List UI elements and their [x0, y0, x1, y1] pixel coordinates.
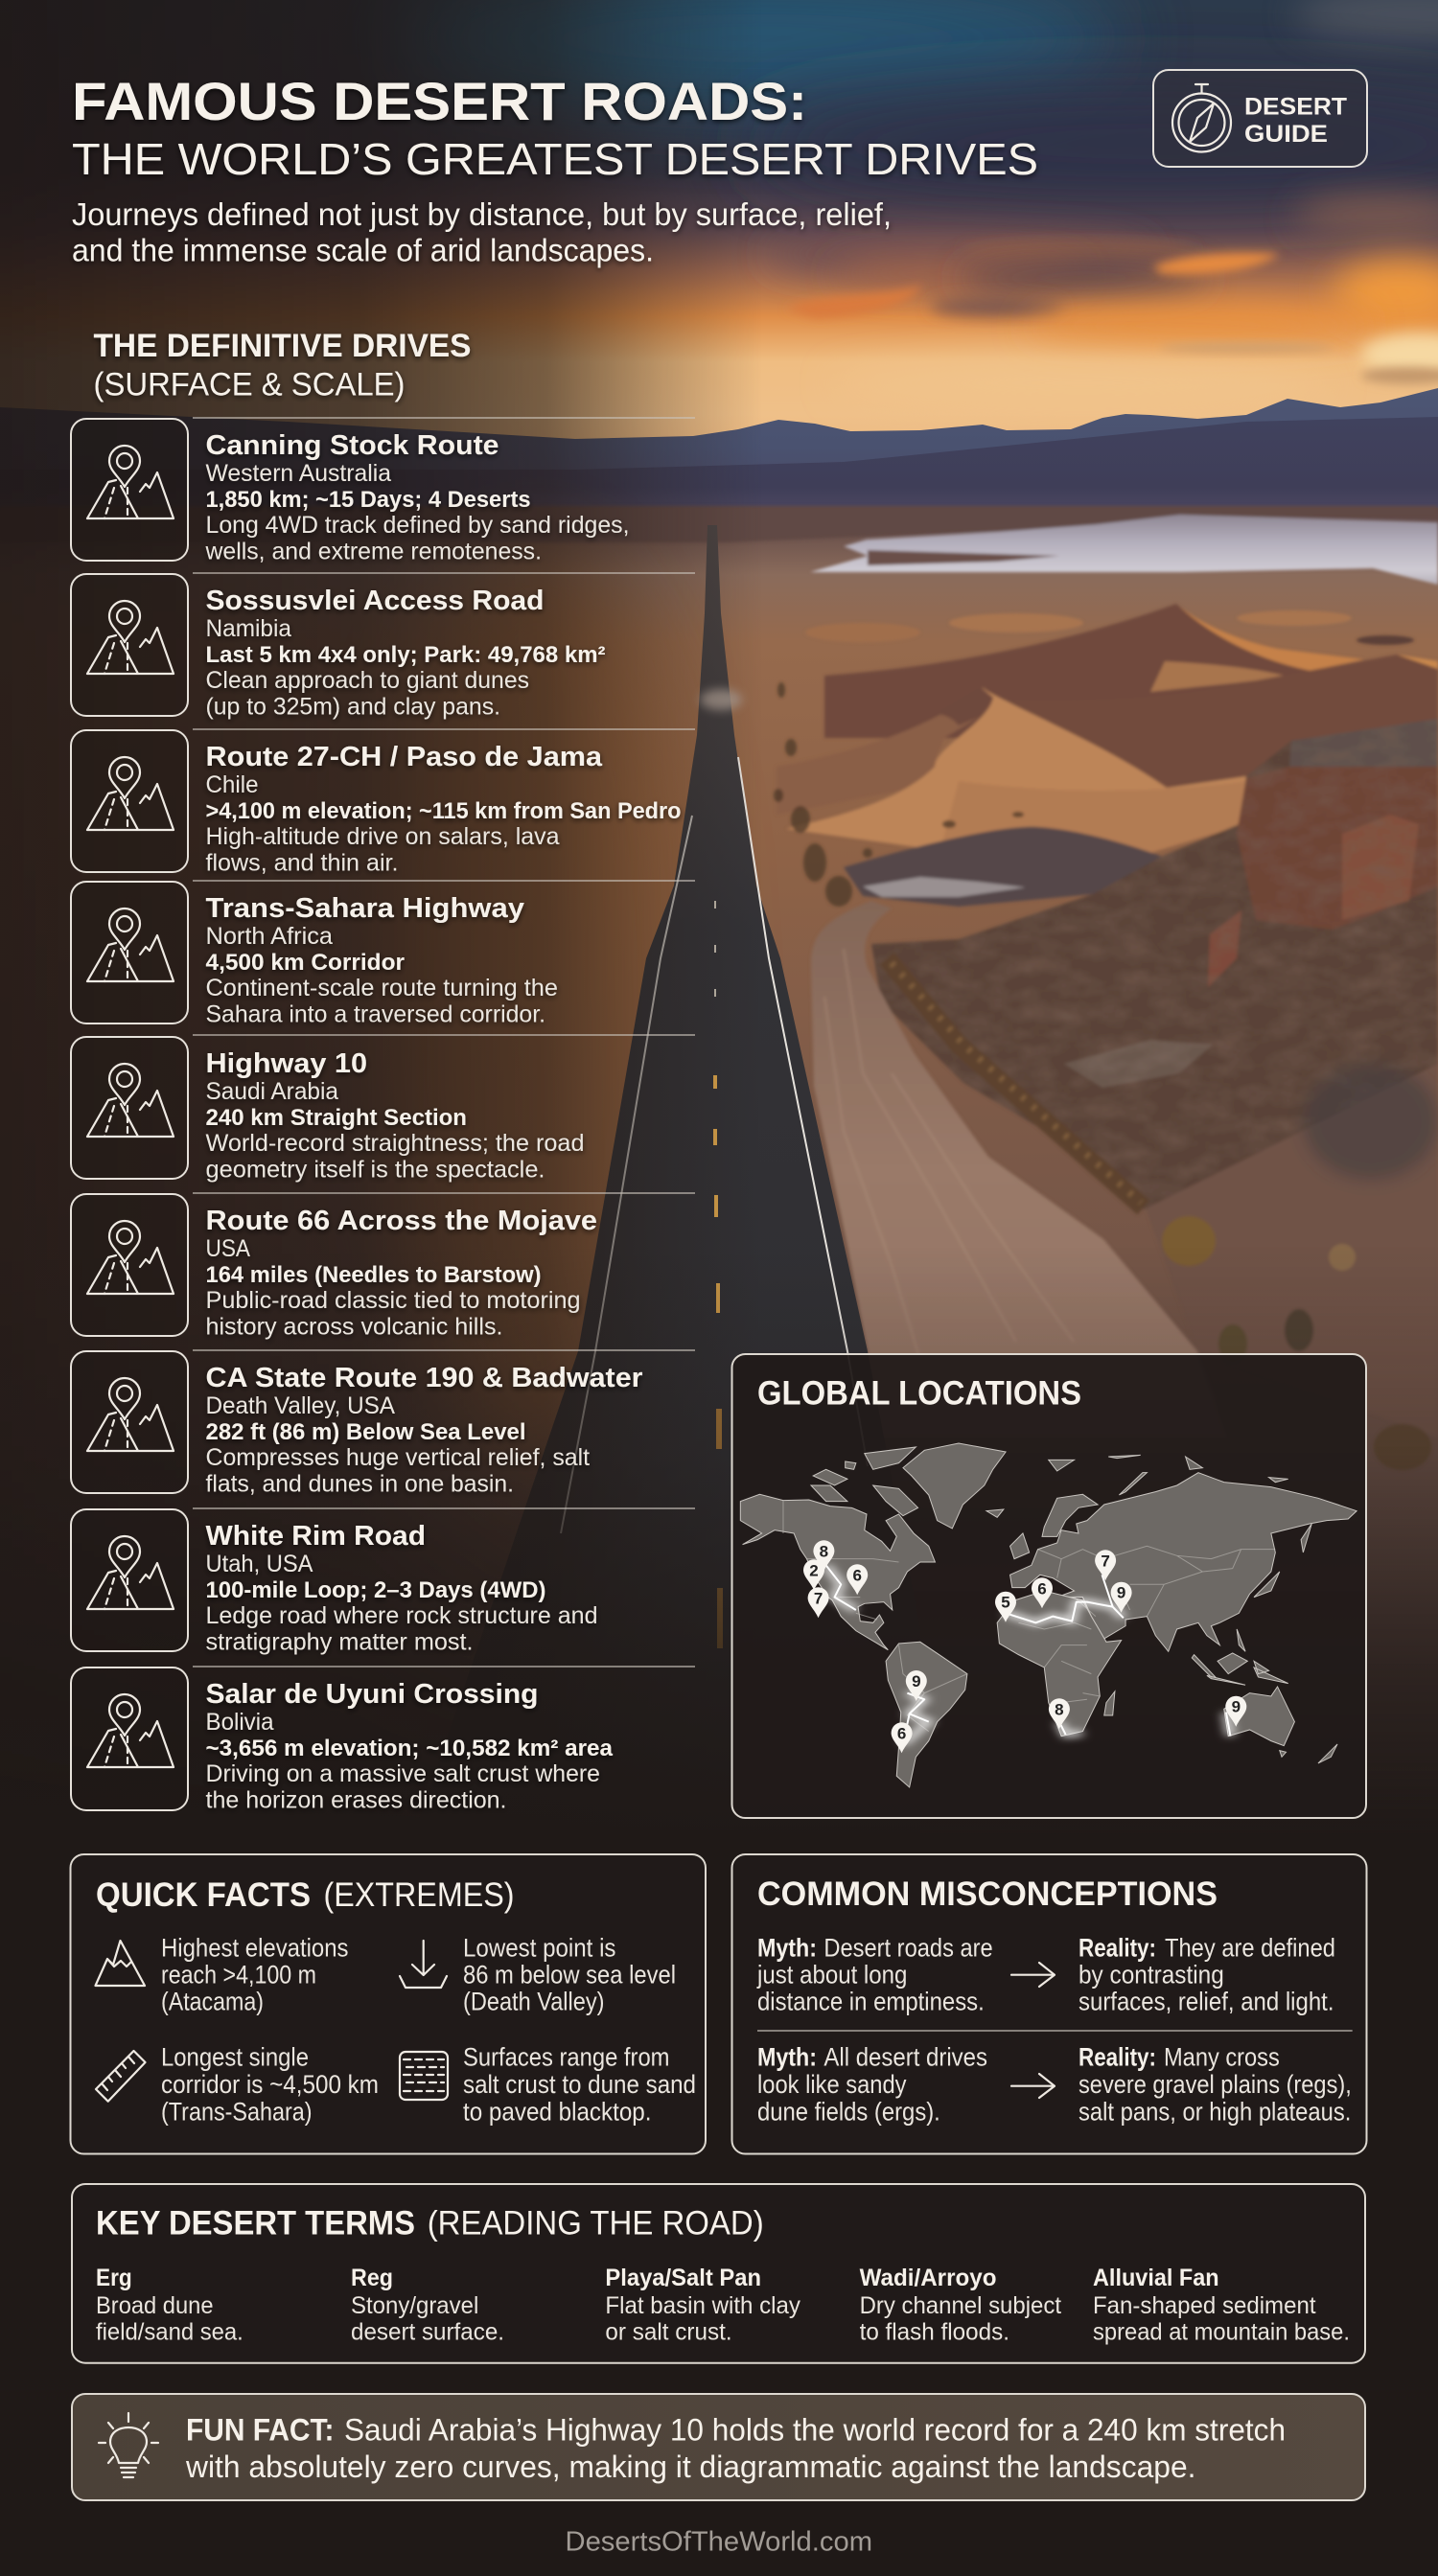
drive text: Public-road classic tied to motoring [205, 1287, 581, 1314]
term: wadi [860, 2265, 1061, 2346]
route icon [71, 574, 188, 716]
drive text: Bolivia [205, 1709, 274, 1736]
fact: lowest point [463, 1934, 676, 2016]
fact: longest corridor: corridor is ~4,500 km [161, 2070, 379, 2099]
drive text: Clean approach to giant dunes [205, 667, 529, 694]
pin USA [847, 1564, 868, 1595]
term: reg [351, 2265, 504, 2346]
icon: ruler [96, 2051, 146, 2102]
panel: key desert terms [72, 2184, 1365, 2363]
arrow [1011, 1963, 1055, 1987]
fact: lowest point: Lowest point is [463, 1934, 615, 1963]
drive text [205, 430, 630, 565]
badge: desert guide [1153, 70, 1367, 167]
intro line [72, 196, 892, 268]
route icon [71, 1668, 188, 1810]
asphalt road [403, 525, 920, 1869]
myth 2: Myth: [757, 2043, 817, 2072]
drive text [205, 586, 606, 721]
drive text [205, 742, 681, 876]
drive text [205, 1363, 642, 1497]
heading: global locations: GLOBAL LOCATIONS [757, 1375, 1081, 1413]
term: playa [605, 2265, 800, 2346]
myth 2 [757, 2043, 987, 2126]
drive text: Salar de Uyuni Crossing [205, 1679, 539, 1710]
panel: fun fact [72, 2394, 1365, 2500]
panel: global locations [732, 1354, 1366, 1818]
heading: common misconceptions: COMMON MISCONCEPTIONS [757, 1875, 1218, 1913]
subtitle heading: THE WORLD’S GREATEST DESERT DRIVES [72, 134, 1038, 184]
drive 1: Canning Stock Route [71, 418, 695, 565]
drive 3: Route 27-CH [71, 729, 695, 876]
drive text: history across volcanic hills. [205, 1313, 502, 1340]
pin Middle East: 7 [1101, 1552, 1110, 1570]
pin Middle East [1095, 1550, 1116, 1580]
pin Chile [892, 1722, 913, 1753]
warm left terrain [374, 546, 700, 1466]
pin Namibia [1049, 1698, 1070, 1729]
pin Australia: 9 [1232, 1698, 1241, 1716]
heading: the definitive drives: (SURFACE & SCALE) [94, 366, 405, 402]
myth 1: just about long [756, 1961, 907, 1990]
route icon [71, 730, 188, 872]
intro line: and the immense scale of arid landscapes. [72, 232, 654, 268]
term: alluvial fan [1093, 2265, 1350, 2346]
arrow [1011, 2074, 1055, 2098]
mountains [0, 388, 1438, 518]
salt lake [810, 515, 1438, 585]
drive text: Long 4WD track defined by sand ridges, [205, 512, 629, 539]
icon: mountain [96, 1941, 145, 1986]
panel: quick facts [71, 1854, 706, 2154]
route icon [71, 882, 188, 1024]
pin Namibia: 8 [1055, 1700, 1064, 1718]
drive text: 164 miles (Needles to Barstow) [205, 1262, 541, 1288]
drive text [205, 1679, 614, 1813]
myth 2: dune fields (ergs). [757, 2097, 940, 2126]
far shore [0, 506, 1438, 542]
route icon [71, 1351, 188, 1493]
term: wadi: Dry channel subject [860, 2292, 1061, 2319]
drive text: Trans-Sahara Highway [205, 893, 524, 924]
pin Bolivia: 9 [912, 1672, 921, 1690]
drive text: 1,850 km; ~15 Days; 4 Deserts [205, 487, 531, 513]
fact: highest elevations [161, 1934, 349, 2016]
drive text: High-altitude drive on salars, lava [205, 823, 560, 850]
fact: lowest point: 86 m below sea level [463, 1961, 676, 1990]
icon: compass [1172, 84, 1231, 151]
drive text: Last 5 km 4x4 only; Park: 49,768 km² [205, 642, 606, 668]
verge scrub [774, 682, 1024, 932]
reality 1: by contrasting [1078, 1961, 1224, 1990]
drive text: flows, and thin air. [205, 849, 399, 876]
pin North Africa: 6 [1037, 1579, 1047, 1598]
pin Chile: 6 [897, 1724, 906, 1742]
sky [0, 0, 1438, 575]
left dark overlay [0, 0, 1438, 1869]
drive text: Utah, USA [205, 1551, 313, 1577]
reality 1: surfaces, relief, and light. [1078, 1988, 1334, 2016]
term: alluvial fan: spread at mountain base. [1093, 2319, 1350, 2346]
terrain [493, 505, 1438, 1470]
fact: highest elevations: (Atacama) [161, 1988, 264, 2016]
drive text: ~3,656 m elevation; ~10,582 km² area [205, 1736, 614, 1761]
term: reg: desert surface. [351, 2319, 504, 2346]
pin West Africa [995, 1592, 1016, 1622]
heading: key desert terms [96, 2205, 764, 2242]
drive text: (up to 325m) and clay pans. [205, 694, 500, 721]
fact: lowest point: (Death Valley) [463, 1988, 604, 2016]
myth 2: All desert drives [823, 2043, 987, 2072]
reality 2: Many cross [1164, 2043, 1280, 2072]
drive 7: CA State Route 190 [71, 1350, 695, 1497]
drive text: Route 66 Across the Mojave [205, 1206, 597, 1236]
right terrain [887, 958, 1438, 1438]
drive text: Sossusvlei Access Road [205, 586, 545, 616]
term: reg: Stony/gravel [351, 2292, 478, 2319]
drive text: stratigraphy matter most. [205, 1629, 474, 1656]
reality 2: severe gravel plains (regs), [1078, 2070, 1352, 2099]
route glow [826, 1565, 1230, 1744]
pin USA: 6 [852, 1566, 862, 1584]
term: erg: Broad dune [96, 2292, 213, 2319]
dirt track [811, 901, 1227, 1438]
reality 2 [1078, 2043, 1352, 2126]
pin USA: 2 [809, 1561, 819, 1579]
pin USA [813, 1540, 834, 1571]
icon: surface texture [400, 2052, 448, 2100]
pin USA: 8 [820, 1542, 828, 1560]
reality 1: Reality: [1078, 1934, 1156, 1963]
drive text [205, 893, 558, 1027]
term: alluvial fan: Alluvial Fan [1093, 2265, 1219, 2291]
term: playa: or salt crust. [605, 2319, 732, 2346]
reality 2: salt pans, or high plateaus. [1078, 2097, 1351, 2126]
drive text: CA State Route 190 & Badwater [205, 1363, 642, 1393]
pin USA [803, 1559, 824, 1590]
desert floor [0, 508, 1438, 1850]
drive text: Continent-scale route turning the [205, 975, 558, 1001]
route icon [71, 1194, 188, 1336]
drive text: Namibia [205, 615, 291, 642]
heading: key desert terms: (READING THE ROAD) [428, 2205, 764, 2242]
reality 2: Reality: [1078, 2043, 1156, 2072]
myth 1 [756, 1934, 993, 2016]
route icon [71, 1509, 188, 1651]
drive text: 100-mile Loop; 2–3 Days (4WD) [205, 1577, 546, 1603]
drive text [205, 1206, 597, 1340]
far plain patches [805, 610, 1414, 645]
drive text: Western Australia [205, 460, 391, 487]
heading: quick facts [96, 1876, 514, 1914]
fun fact text: with absolutely zero curves, making it diagrammatic against the landscape. [185, 2450, 1195, 2484]
icon: light bulb [99, 2413, 158, 2477]
drive text: Sahara into a traversed corridor. [205, 1000, 545, 1027]
badge text: DESERT [1244, 94, 1347, 121]
fact: highest elevations: reach >4,100 m [161, 1961, 316, 1990]
drive text: 282 ft (86 m) Below Sea Level [205, 1419, 525, 1445]
pin Arabia: 9 [1117, 1584, 1125, 1602]
heading: quick facts: (EXTREMES) [324, 1876, 514, 1914]
term: wadi: to flash floods. [860, 2319, 1009, 2346]
drive text: Ledge road where rock structure and [205, 1602, 598, 1629]
drive text: Highway 10 [205, 1048, 367, 1079]
term: erg: Erg [96, 2265, 132, 2291]
heading: the definitive drives [94, 328, 472, 402]
badge text [1244, 94, 1347, 148]
drive 5: Highway 10 [71, 1035, 695, 1183]
heading: quick facts: QUICK FACTS [96, 1876, 311, 1914]
location pins [803, 1540, 1246, 1753]
fact: longest corridor [161, 2043, 379, 2126]
drive text: Route 27-CH / Paso de Jama [205, 742, 603, 772]
drive text: flats, and dunes in one basin. [205, 1470, 514, 1497]
drive text: North Africa [205, 923, 333, 950]
drive text: Canning Stock Route [205, 430, 499, 461]
term: erg: field/sand sea. [96, 2319, 244, 2346]
drive text: 240 km Straight Section [205, 1105, 467, 1131]
myth 1: distance in emptiness. [757, 1988, 985, 2016]
term: wadi: Wadi/Arroyo [860, 2265, 997, 2291]
drive text: World-record straightness; the road [205, 1130, 585, 1157]
sand dunes [777, 604, 1438, 853]
fact: surfaces: Surfaces range from [463, 2043, 669, 2072]
drive 6: Route 66 [71, 1193, 695, 1340]
scree and bushes [887, 958, 1438, 1470]
panel: common misconceptions [732, 1854, 1367, 2154]
grey rock outcrop [844, 827, 1165, 907]
fact: longest corridor: Longest single [161, 2043, 309, 2072]
header [72, 71, 1038, 268]
drive text: 4,500 km Corridor [205, 950, 405, 976]
badge text: GUIDE [1244, 121, 1328, 148]
fact: highest elevations: Highest elevations [161, 1934, 349, 1963]
drive text: Death Valley, USA [205, 1392, 395, 1419]
drive text: Compresses huge vertical relief, salt [205, 1444, 590, 1471]
drive text: geometry itself is the spectacle. [205, 1156, 545, 1183]
fun fact text [185, 2413, 1286, 2484]
term: playa: Playa/Salt Pan [605, 2265, 761, 2291]
pin North Africa [1032, 1577, 1053, 1608]
pin Australia [1225, 1696, 1246, 1727]
drive text: >4,100 m elevation; ~115 km from San Pedro [205, 798, 681, 824]
fact: longest corridor: (Trans-Sahara) [161, 2097, 313, 2126]
drive 9: Salar de Uyuni Crossing [71, 1667, 695, 1813]
drive text [205, 1048, 585, 1183]
drive text: the horizon erases direction. [205, 1786, 506, 1813]
reality 1 [1078, 1934, 1335, 2016]
title: FAMOUS DESERT ROADS: [72, 71, 807, 131]
intro line: Journeys defined not just by distance, but by surface, relief, [72, 196, 892, 232]
heading: the definitive drives: THE DEFINITIVE DRIVES [94, 328, 472, 364]
icon: down arrow to basin [400, 1941, 447, 1988]
route icon [71, 1037, 188, 1179]
fun fact text: FUN FACT: [186, 2413, 334, 2448]
drive text: wells, and extreme remoteness. [205, 539, 542, 565]
drive 8: White Rim Road [71, 1508, 695, 1656]
bottom fade [0, 1246, 1438, 1840]
myth 1: Myth: [757, 1934, 817, 1963]
fact: surfaces: salt crust to dune sand [463, 2070, 696, 2099]
term: alluvial fan: Fan-shaped sediment [1093, 2292, 1316, 2319]
pin West Africa: 5 [1001, 1594, 1010, 1612]
fun fact text: Saudi Arabia’s Highway 10 holds the world record for a 240 km stretch [344, 2413, 1286, 2448]
fact: surfaces [463, 2043, 696, 2126]
drive text [205, 1521, 598, 1656]
cliff [863, 719, 1438, 1217]
term: reg: Reg [351, 2265, 393, 2291]
fact: surfaces: to paved blacktop. [463, 2097, 652, 2126]
drive text: White Rim Road [205, 1521, 426, 1552]
reality 1: They are defined [1165, 1934, 1335, 1963]
drive text: USA [205, 1235, 250, 1262]
pin Arabia [1111, 1582, 1132, 1613]
myth 2: look like sandy [757, 2070, 907, 2099]
pin USA [808, 1587, 829, 1618]
heading: key desert terms: KEY DESERT TERMS [96, 2205, 415, 2242]
world map [740, 1443, 1357, 1787]
drive text: Driving on a massive salt crust where [205, 1760, 600, 1787]
drive 2: Sossusvlei Access Road [71, 573, 695, 721]
route icon [71, 419, 188, 561]
pin USA: 7 [814, 1589, 823, 1607]
drive text: Saudi Arabia [205, 1078, 338, 1105]
myth 1: Desert roads are [823, 1934, 993, 1963]
drive 4: Trans-Sahara Highway [71, 881, 695, 1027]
footer: DesertsOfTheWorld.com [566, 2527, 872, 2558]
list: definitive drives [71, 418, 695, 1813]
term: playa: Flat basin with clay [605, 2292, 800, 2319]
term: erg [96, 2265, 244, 2346]
pin Bolivia [906, 1670, 927, 1701]
drive text: Chile [205, 771, 259, 798]
